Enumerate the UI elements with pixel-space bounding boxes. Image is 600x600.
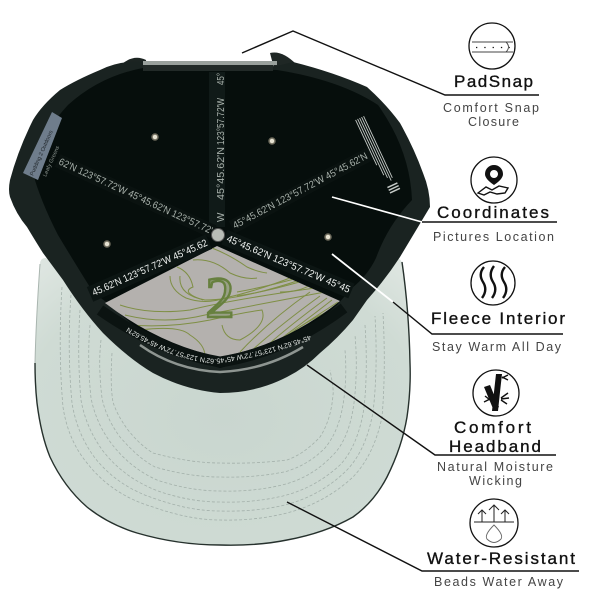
text: beads water away: Beads Water Away [434,575,564,589]
icon: bamboo [473,370,519,416]
seam tape: lower left: 45.62'N 123°57.72'W 45°45.62 [91,238,210,299]
seam tape: lower right: 45°45.62'N 123°57.72'W 45°45 [225,234,352,296]
snap strap [143,61,277,71]
heading: water-resistant: Water-Resistant [427,549,575,568]
icon: map pin [471,157,517,203]
icon: water resistant [470,499,518,547]
text: natural moisture wicking: Natural Moisture [437,460,553,474]
heading: coordinates: Coordinates [437,203,549,222]
heading: padsnap: PadSnap [454,72,533,91]
leader: comfort headband [307,365,556,455]
leader: fleece interior [332,254,563,334]
visor [35,258,410,545]
seam tape: upper [209,72,227,227]
seam tape: left: 62'N 123°57.72'W 45°45.62'N 123°57.72' [57,157,214,237]
headband tape [97,304,347,374]
icon: heat waves [471,261,515,305]
headband tape: 45°45.62'N 123°57.72'W 45°45.62'N 123°57.72'W 45°45.62'N [126,328,310,364]
text: natural moisture wicking [437,460,553,488]
heading: fleece interior: Fleece Interior [431,309,565,328]
inner brand label: Pudding 2 Outdoors [29,129,55,177]
leader lines [242,31,579,571]
leader: coordinates [332,197,557,222]
text: stay warm all day: Stay Warm All Day [432,340,562,354]
inner brand label: Leafy Greens [42,145,61,178]
text: comfort snap closure [443,101,539,129]
seam tape: right: 45°45.62'N 123°57.72'W 45°45.62'N [231,151,370,232]
heading: comfort headband [449,418,541,456]
leader: water-resistant [287,502,579,571]
seam tape: upper: 45°45.62'N [216,147,227,200]
center snap [212,228,224,242]
seam tape: upper: W [216,212,227,222]
topographic undervisor panel [105,246,340,358]
text: comfort snap closure: Comfort Snap [443,101,539,115]
leader: padsnap [242,31,539,95]
eyelets [104,134,331,247]
text: natural moisture wicking: Wicking [469,474,522,488]
seam tape: upper: 45° [216,73,227,85]
text: comfort snap closure: Closure [468,115,519,129]
heading: comfort headband: Headband [449,437,541,456]
inner brand label [23,112,62,180]
embroidered 2: 2 [206,265,234,330]
fleece interior [32,68,412,368]
seam tape: upper: 123°57.72'W [216,98,227,145]
heading: comfort headband: Comfort [454,418,531,437]
icon: padsnap strap [469,23,515,69]
top strap loops [122,52,296,78]
crown [9,62,430,393]
text: pictures location: Pictures Location [433,230,554,244]
cap illustration [9,52,430,546]
care label [355,115,400,194]
